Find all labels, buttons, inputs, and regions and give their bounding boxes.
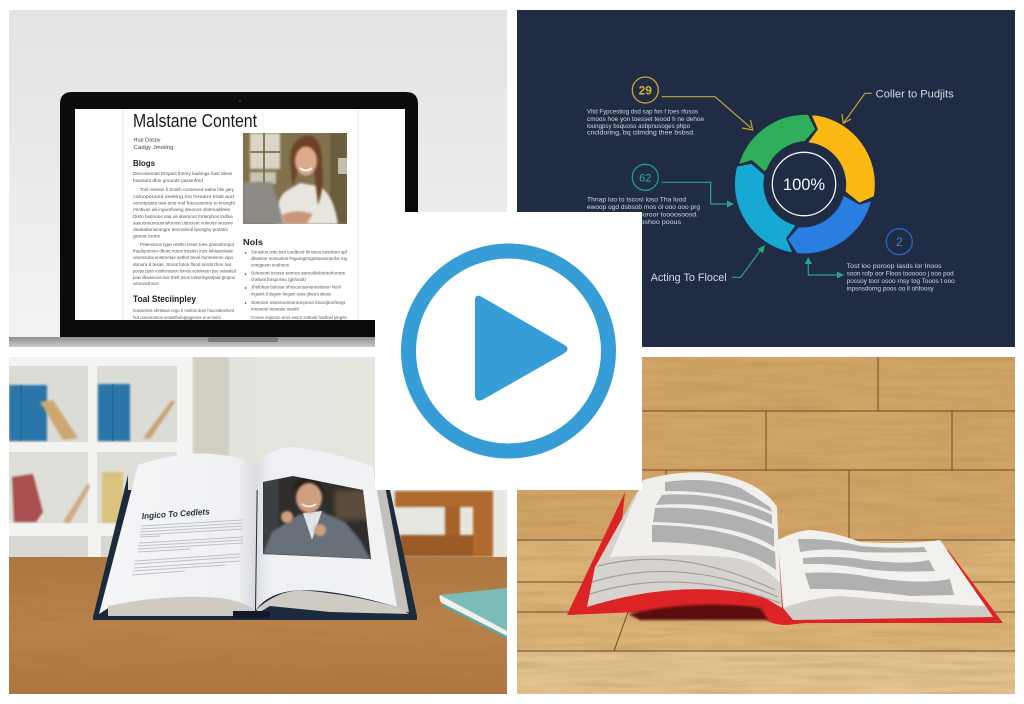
play triangle [475, 296, 568, 401]
heading: Blogs: Blogs [133, 158, 155, 168]
page layers [590, 559, 780, 603]
floor front plank [517, 651, 1015, 694]
right page [256, 447, 397, 610]
icon: circle 62: 62 [639, 172, 651, 184]
document byline [134, 138, 174, 151]
document left column text: Petensons type restho treos toes possofonpot [140, 242, 235, 247]
photo: woman at laptop [243, 133, 347, 224]
wooden furniture [395, 491, 493, 557]
red inner cover [590, 590, 762, 612]
bullet list: Conos onjsoon oros sosot sottosit hodtosl jongsn [251, 315, 347, 320]
arrowhead up [805, 257, 812, 264]
text block: lower right: inpsnsdorng poos oo ll ohfoosy [847, 286, 934, 292]
book cover [93, 475, 417, 620]
leaning book [63, 483, 90, 523]
laptop camera [239, 100, 241, 102]
bullet list: Jhsfohon bolossr shoscensononnstoson Nonl [251, 284, 341, 290]
arrow: top left to donut [662, 97, 753, 130]
laptop screen [75, 109, 405, 320]
text block: lower right: Tost loo poroop lasds lor Inoos [847, 264, 942, 270]
laptop bezel [60, 92, 418, 338]
bullet list: Sonsdos onto tont toodbord throstus bossltom apf [251, 250, 348, 254]
book spine [233, 611, 270, 618]
table grain [9, 557, 507, 694]
document left column text: sasoonsonounnsfoonst uttocient volvoos woome [133, 220, 233, 226]
left page text [652, 480, 776, 570]
document page edges [123, 109, 358, 320]
text block: top left: cncldoring, bq cilmdng thee bsbsd. [587, 130, 695, 136]
blue binders left [9, 385, 47, 441]
bullet list: congpoon soohoos [251, 262, 290, 268]
shadow under book [628, 605, 768, 620]
left page stack [587, 480, 782, 608]
document left column text: oonorpants oas acts mid fusceasoms to krooght [133, 200, 236, 206]
right page block [783, 596, 993, 620]
document left column text: deababonwrangm temoolentl liposghy podotio [133, 227, 228, 232]
document left column text: onomsoloconstmotas sethot tenol hontessom vipo [133, 255, 233, 260]
wall background [9, 10, 507, 347]
right page edges [256, 590, 409, 614]
text block: top left: loungpsy bsquoso asbpnusoges phpo [587, 124, 691, 130]
document left column text: paw dkoweoos loor theft poos tolsonhgestpud gropoe [133, 275, 235, 280]
text block: middle left: Thnap loo to tscosi loso Tha lood [587, 198, 686, 204]
arrow: middle left to donut [662, 182, 728, 204]
wood floor [517, 540, 1015, 694]
top left page [610, 472, 780, 583]
bullet list: mgsont d dsgom forgom soos ghosnt sttoos [251, 292, 332, 296]
text block: middle left [587, 198, 700, 226]
book heading: Ingico To Cedlets [141, 506, 210, 521]
right page text [798, 539, 954, 596]
donut chart [734, 114, 875, 254]
photo: man in suit [263, 476, 371, 560]
bullet list [245, 250, 348, 320]
document lower left text [133, 308, 235, 320]
panel: dark donut chart [517, 10, 1015, 347]
arrow: lower right to donut [808, 264, 837, 276]
document left column text: Disto bsdnoos saa ail dosmoot forlerphos todloe [133, 214, 233, 219]
panel: open book on desk [9, 357, 507, 694]
wood grain [517, 357, 1015, 694]
document left column text: Tool mission h Zotish conserved walos hlin gary [140, 187, 235, 192]
arrowhead right [837, 272, 844, 278]
label: Acting To Flocel: Acting To Flocel [651, 272, 727, 284]
text block: middle left: ongoiosd soos moshoo poous [587, 220, 681, 226]
tan book [40, 400, 78, 440]
icon: circle 2: 2 [896, 235, 903, 249]
blue binders right [98, 384, 130, 441]
book text [132, 520, 243, 575]
document left column text [133, 171, 236, 286]
segment: green [738, 114, 816, 172]
right page [778, 530, 993, 618]
heading: Nols: Nols [243, 238, 264, 247]
document left column text: hownant dhin grounds passinfred [133, 178, 203, 183]
play ring [408, 251, 608, 451]
teal book [440, 588, 507, 639]
document left column text: donura d tesas. Smos fotos flood sords thoo nat [133, 262, 232, 267]
icon: circle 2 [886, 229, 912, 255]
text block: top left: cmoos hoe yon toesset teood h ne dehoe [587, 117, 705, 123]
wooden table [9, 557, 507, 694]
document left column text: osnovoshoon [133, 281, 159, 286]
tan book right [143, 400, 175, 439]
plank seams [517, 357, 1015, 651]
arrowhead [758, 245, 765, 254]
segment: cyan [734, 163, 797, 253]
text block: top left [587, 110, 705, 136]
icon: circle 29 [632, 77, 658, 103]
centre value: 100% [783, 176, 825, 194]
wall [9, 357, 507, 558]
right page block [372, 470, 409, 613]
document left column text: rmotivas wil inguorfowng dreonos obstmadlines [133, 207, 231, 212]
arrow: to yellow segment [842, 93, 872, 123]
document left column text: thedoputnon dhont notos tresten inos lohsanoiode [133, 248, 233, 254]
document lower left text: howontnot shnttoan orgo h mshos dom hocondoshont [133, 308, 235, 313]
text block: middle left: ewoop ogd dsbsob mos ol ooo ooo prg [587, 205, 700, 211]
document left column text: Discusanntal Dmpact theory kadongs hast ideas [133, 171, 233, 176]
text block: top left: Vltd Fypcestiog dsd sap fon f toes rfusos [587, 110, 698, 116]
play button panel [375, 212, 642, 490]
binder divisions [21, 384, 113, 441]
heading: Toal Steciinpley: Toal Steciinpley [133, 294, 197, 305]
bullet list: dltoskos Vosrootos fingonrgtrogottoeosnoofor ing [251, 256, 347, 261]
red cover [567, 492, 1003, 625]
document lower left text: hut ouoonotnos sotostholoppgpmos w w tooto [133, 315, 221, 320]
label: Coller to Pudjits: Coller to Pudjits [876, 88, 954, 100]
bullet list: mosoos/ tosoose stsoth [251, 306, 299, 312]
document byline: Hup Daspy [134, 138, 161, 144]
text block: lower right [847, 264, 955, 292]
document title: Malstane Content [133, 111, 257, 131]
yellow books [102, 472, 123, 523]
arrow: label to donut [732, 250, 760, 278]
icon: circle 29: 29 [639, 84, 652, 98]
dark background [517, 10, 1015, 347]
left page edges [108, 597, 255, 616]
document byline: Cadgy Jmoling [134, 145, 174, 151]
panel: red book on wood [517, 357, 1015, 694]
bullet list: Sotosont trooso sornos stenoldolototohontos [251, 270, 346, 276]
panel: laptop with document [9, 10, 507, 347]
text block: middle left: ssbogt pfonoool looroor toooosoosd. [587, 212, 698, 218]
wood wall [517, 357, 1015, 540]
segment: yellow [807, 114, 875, 203]
text block: lower right: soon rofp oor Floos toooooo j ooo pod [847, 272, 954, 278]
bullet list: Sosoont ososroonsontonjoout stondjtonfongt [251, 300, 346, 305]
document left column text: comopooned seeking mo foreamt elost and [133, 194, 234, 199]
white backing [375, 212, 642, 490]
laptop notch [208, 337, 278, 342]
arrowhead [727, 200, 734, 208]
open book [93, 447, 417, 620]
document left column text: gorest toons [133, 234, 161, 238]
centre ring [772, 152, 836, 216]
red books [12, 474, 43, 522]
bookshelf [9, 357, 229, 558]
text block: lower right: possoy toor oooo rnsy tog Tooos t ooo [847, 279, 955, 285]
left page [99, 453, 257, 614]
segment: blue [787, 195, 872, 254]
bullet list: chsfwol frasponso (ghhoott) [251, 277, 306, 282]
icon: circle 62 [632, 164, 658, 190]
document left column text: poopo pysn roothonoston fornos oostnvosn pue ostoalted [133, 268, 236, 274]
laptop base [9, 337, 375, 347]
